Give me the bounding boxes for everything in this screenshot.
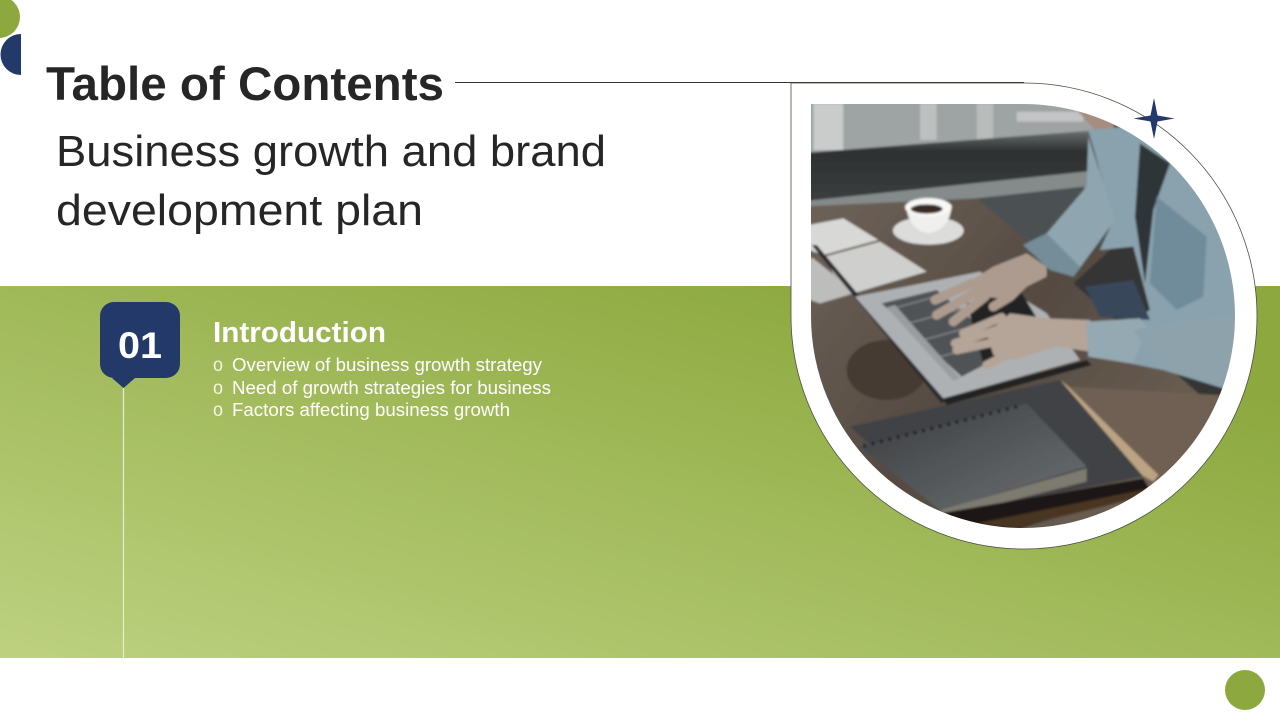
decorative green circle top left	[0, 0, 20, 38]
section badge 01	[100, 302, 180, 388]
section badge 01: 01	[118, 325, 162, 366]
section bullet list: o	[213, 355, 223, 376]
decorative navy half circle top left	[1, 34, 21, 75]
timeline stem	[122, 388, 124, 658]
section bullet list: Need of growth strategies for business	[232, 378, 551, 398]
photo: person typing on laptop	[800, 97, 1250, 537]
title rule	[455, 82, 1024, 84]
section bullet list: Factors affecting business growth	[232, 400, 510, 420]
subtitle: development plan	[56, 186, 423, 235]
section bullet list: o	[213, 400, 223, 421]
section bullet list: Overview of business growth strategy	[232, 355, 542, 375]
section bullet list	[213, 355, 551, 421]
decorative green circle bottom right	[1225, 670, 1265, 710]
green background band	[0, 286, 1280, 658]
subtitle: Business growth and brand	[56, 127, 606, 176]
title: Table of Contents	[46, 57, 444, 110]
section bullet list: o	[213, 378, 223, 399]
subtitle	[56, 127, 606, 235]
star ornament	[1134, 98, 1174, 139]
photo frame	[791, 83, 1257, 549]
section heading: Introduction	[213, 317, 386, 349]
